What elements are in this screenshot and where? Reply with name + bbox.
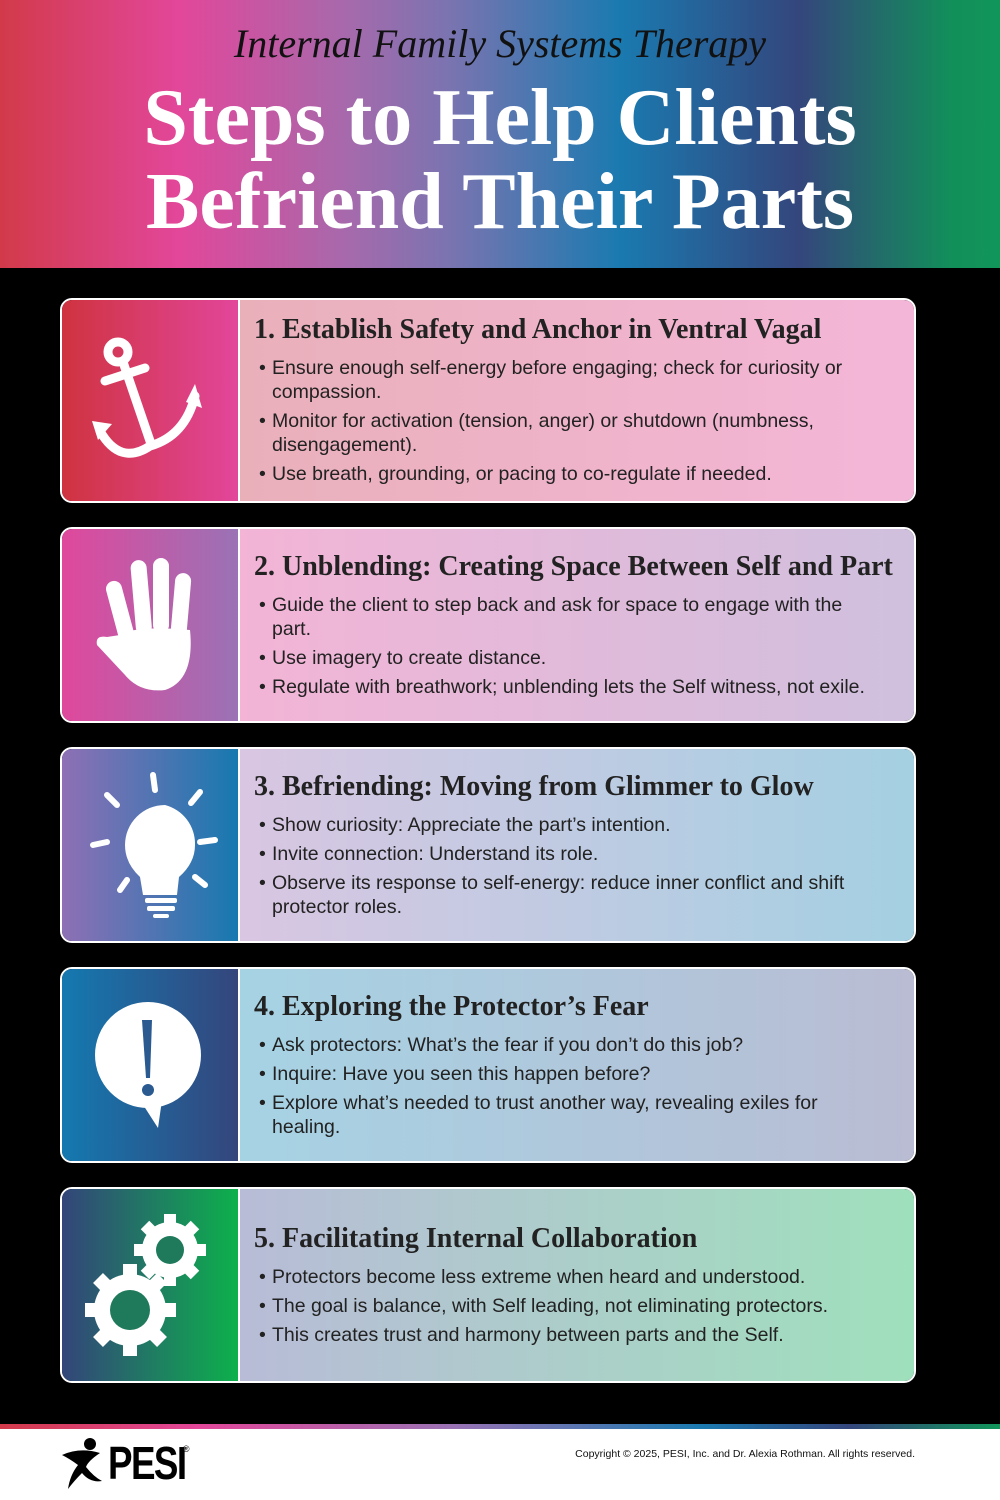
text 4: Ask protectors: What’s the fear if you don’t do this job? [272, 1034, 743, 1056]
text 1: 1. Establish Safety and Anchor in Ventral Vagal [254, 314, 821, 345]
text 2: Use imagery to create distance. [272, 647, 546, 669]
text 4: 4. Exploring the Protector’s Fear [254, 991, 649, 1022]
card 3 [60, 747, 916, 943]
card 4 [60, 967, 916, 1163]
text 5: 5. Facilitating Internal Collaboration [254, 1223, 697, 1254]
text 3: 3. Befriending: Moving from Glimmer to Glow [254, 771, 814, 802]
text 2: Guide the client to step back and ask for space to engage with the part. [272, 594, 842, 640]
text 2: 2. Unblending: Creating Space Between Self and Part [254, 551, 893, 582]
subtitle: Internal Family Systems Therapy [234, 21, 766, 66]
text 4: Inquire: Have you seen this happen before? [272, 1063, 650, 1085]
text 3: Invite connection: Understand its role. [272, 843, 598, 865]
text 5: The goal is balance, with Self leading, not eliminating protectors. [272, 1295, 828, 1317]
text 2: Regulate with breathwork; unblending lets the Self witness, not exile. [272, 676, 865, 698]
text 5: This creates trust and harmony between parts and the Self. [272, 1324, 784, 1346]
card 2 [60, 527, 916, 723]
text 5 [240, 1189, 914, 1381]
text 1: Monitor for activation (tension, anger) or shutdown (numbness, disengagement). [272, 410, 814, 456]
logo: PESI: ® [183, 1444, 189, 1454]
text 4 [240, 969, 914, 1161]
footer gradient line [0, 1424, 1000, 1429]
text 1: Ensure enough self-energy before engaging; check for curiosity or compassion. [272, 357, 842, 403]
title line 2: Befriend Their Parts [146, 158, 854, 246]
icon: lightbulb [62, 749, 240, 941]
text 2 [240, 529, 914, 721]
text 3 [240, 749, 914, 941]
copyright: Copyright © 2025, PESI, Inc. and Dr. Alexia Rothman. All rights reserved. [575, 1448, 915, 1460]
text 1 [240, 300, 914, 501]
icon: hand [62, 529, 240, 721]
footer [0, 1424, 1000, 1500]
card 1 [60, 298, 916, 503]
text 4: Explore what’s needed to trust another way, revealing exiles for healing. [272, 1092, 818, 1138]
icon: gears [62, 1189, 240, 1381]
logo: PESI [62, 1437, 190, 1489]
icon: anchor [62, 300, 240, 501]
text 1: Use breath, grounding, or pacing to co-regulate if needed. [272, 463, 772, 485]
card 5 [60, 1187, 916, 1383]
icon: exclamation bubble [62, 969, 240, 1161]
header banner [0, 0, 1000, 268]
text 3: Observe its response to self-energy: reduce inner conflict and shift protector roles. [272, 872, 844, 918]
logo: PESI: PESI [108, 1437, 185, 1489]
text 5: Protectors become less extreme when heard and understood. [272, 1266, 805, 1288]
title line 1: Steps to Help Clients [143, 74, 857, 162]
text 3: Show curiosity: Appreciate the part’s intention. [272, 814, 671, 836]
